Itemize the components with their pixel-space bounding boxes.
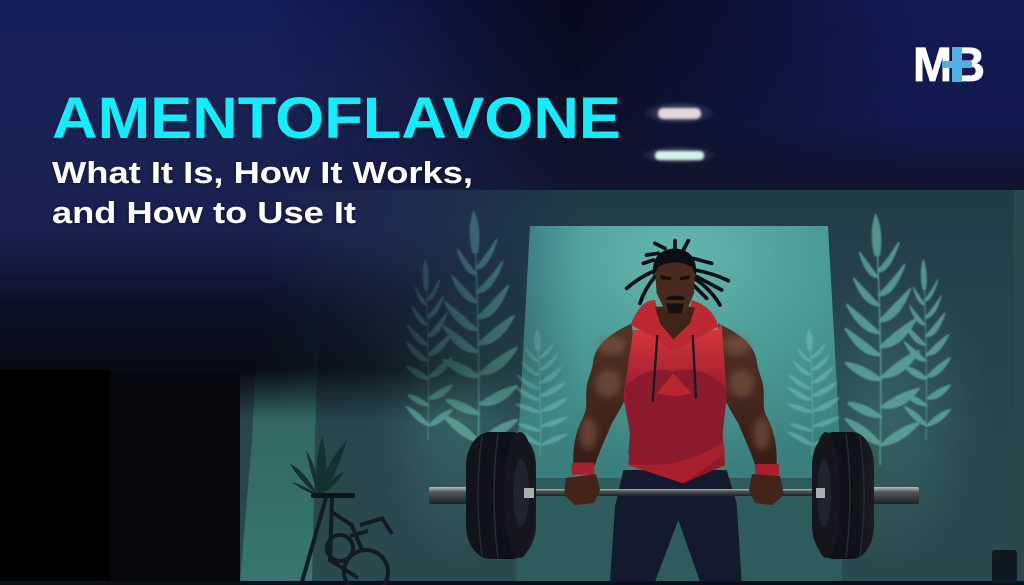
left navy gradient overlay (0, 0, 600, 420)
title: AMENTOFLAVONE (52, 86, 621, 151)
hoodie chest shadow (625, 369, 727, 459)
wall glow around panel (370, 270, 990, 570)
left wristband (572, 463, 594, 475)
plant and bicycle (290, 436, 392, 585)
subtitle: What It Is, How It Works, (52, 155, 473, 190)
floor line (0, 581, 1024, 585)
ceiling (0, 0, 1024, 190)
athlete (572, 241, 779, 582)
barbell (429, 432, 919, 559)
right wristband (755, 464, 779, 475)
right wall column (1014, 178, 1024, 581)
right plates (812, 432, 874, 559)
logo: M+B: B (951, 39, 985, 92)
face features (660, 275, 690, 313)
bar (466, 489, 812, 496)
right sleeve (870, 487, 919, 504)
logo: M+B: M (913, 39, 952, 92)
head (655, 259, 695, 314)
left large fern (406, 212, 517, 462)
chest mark (657, 373, 692, 397)
left arm (573, 323, 635, 465)
bicycle (302, 493, 392, 585)
back panel (516, 226, 842, 480)
neck (655, 307, 697, 340)
hood inner neck (655, 307, 695, 339)
drawstrings (653, 335, 696, 402)
plant (290, 436, 347, 495)
top navy overlay (612, 0, 1024, 172)
hood (631, 300, 718, 352)
legs (610, 470, 742, 582)
sleeveless hoodie (623, 323, 727, 483)
left sleeve (429, 487, 469, 504)
subtitle: and How to Use It (52, 195, 356, 230)
ceiling light lower (641, 145, 717, 165)
hands (564, 474, 784, 505)
hair back (627, 241, 728, 305)
right large fern (845, 215, 950, 465)
ceiling light upper (643, 101, 715, 125)
hair top (653, 248, 696, 277)
left plates (466, 432, 536, 559)
logo: M+B (913, 39, 985, 92)
small panel fern right (788, 330, 839, 455)
bottom left black area (110, 372, 240, 585)
small panel fern left (516, 330, 567, 455)
arm highlights (580, 336, 770, 450)
hem highlight (628, 442, 725, 483)
left pillar (240, 232, 325, 582)
right arm (715, 323, 777, 465)
lower back panel (516, 478, 842, 582)
subtitle (52, 155, 473, 230)
floor canister (992, 550, 1017, 583)
